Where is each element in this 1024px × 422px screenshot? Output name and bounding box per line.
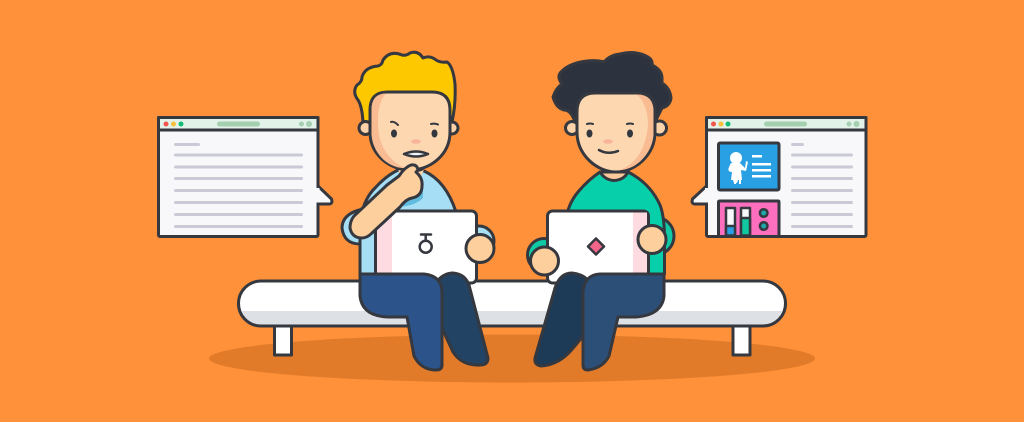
bench seat [238, 281, 786, 326]
back leg [535, 273, 588, 366]
right eye [627, 130, 633, 138]
face shading [620, 94, 654, 170]
hair [355, 52, 455, 122]
hair [553, 53, 671, 122]
nose [603, 139, 613, 144]
right eyebrow [627, 122, 633, 125]
bench [238, 281, 786, 355]
title bar [158, 118, 318, 130]
right browser window [692, 118, 866, 236]
tail opening [316, 188, 320, 202]
right hand [638, 226, 666, 254]
front leg [360, 274, 442, 370]
speech tail [692, 186, 706, 204]
blue profile card [718, 143, 779, 190]
person left: blond man [342, 52, 494, 370]
back leg [438, 273, 488, 365]
laptop logo [588, 238, 604, 254]
laptop [376, 211, 476, 283]
shirt [560, 172, 664, 274]
left browser window [158, 118, 332, 236]
right hand [466, 234, 494, 262]
pink chart card [718, 201, 779, 236]
left eyebrow [391, 122, 398, 125]
arm and hand on chin [350, 165, 422, 238]
title bar [706, 118, 866, 130]
window frame [706, 118, 866, 236]
left ear [566, 122, 578, 134]
window frame [158, 118, 318, 236]
left ear [359, 122, 372, 134]
text lines [174, 143, 303, 228]
right eye [432, 130, 438, 138]
mouth [404, 152, 428, 156]
front leg [583, 274, 664, 370]
right sleeve [464, 226, 494, 256]
right sleeve [636, 217, 674, 255]
bench left leg [274, 324, 292, 355]
person right: dark haired man [528, 53, 674, 370]
laptop side strip [633, 212, 647, 274]
laptop side strip [377, 212, 392, 274]
right eyebrow [431, 123, 438, 126]
left sleeve [342, 208, 380, 244]
left sleeve [528, 238, 560, 272]
nose [411, 139, 421, 144]
left hand [530, 247, 558, 275]
laptop logo [420, 234, 432, 253]
ground shadow [209, 334, 815, 382]
right ear [652, 121, 666, 135]
head [577, 93, 655, 172]
smile [599, 150, 618, 153]
neck [398, 168, 424, 181]
neck [600, 172, 628, 180]
left eye [586, 130, 592, 138]
head [370, 92, 450, 170]
laptop [548, 211, 648, 283]
tail opening [705, 188, 709, 202]
left eyebrow [587, 122, 593, 125]
shirt [360, 170, 456, 274]
shirt shadow [396, 190, 423, 206]
left eye [391, 130, 397, 138]
speech tail [318, 186, 332, 204]
right ear [446, 122, 458, 134]
text lines [791, 143, 853, 228]
bench right leg [733, 324, 750, 355]
face shading [372, 94, 404, 168]
